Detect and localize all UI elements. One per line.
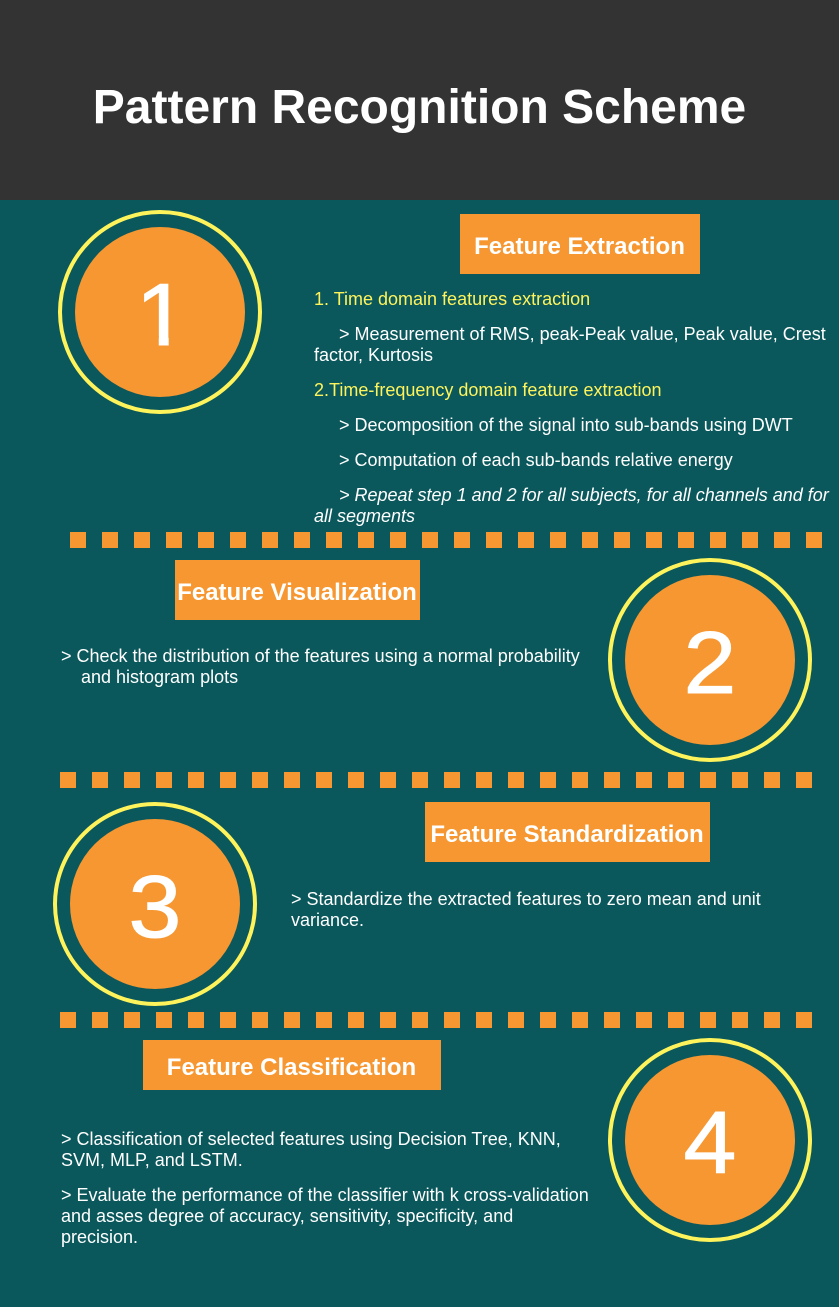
text block: feature extraction steps: factor, Kurtosis [314, 345, 433, 365]
text block: feature classification: > Classification of selected features using Decision Tree, KNN, [61, 1129, 561, 1149]
icon: number 3 badge: 3 [129, 857, 181, 956]
text block: feature visualization: > Check the distribution of the features using a normal probability [61, 646, 580, 666]
icon: number 3 badge [53, 802, 257, 1006]
heading: Feature Classification [142, 1040, 440, 1090]
icon: number 1 badge: 1 [136, 265, 188, 364]
text block: feature extraction steps [314, 289, 830, 526]
icon: number 2 badge [608, 558, 812, 762]
heading: Feature Standardization [424, 802, 710, 862]
heading: Feature Extraction: Feature Extraction [474, 233, 685, 260]
text block: feature classification [61, 1129, 589, 1247]
icon: number 4 badge [608, 1038, 812, 1242]
title: Pattern Recognition Scheme [93, 81, 746, 134]
heading: Feature Standardization: Feature Standardization [430, 821, 704, 848]
text block: feature extraction steps: 1. Time domain features extraction [314, 289, 590, 309]
text block: feature classification: > Evaluate the performance of the classifier with k cross-validation [61, 1185, 589, 1205]
icon: number 1 badge [58, 210, 262, 414]
text block: feature classification: SVM, MLP, and LSTM. [61, 1150, 243, 1170]
heading: Feature Visualization: Feature Visualization [177, 579, 417, 606]
text block: feature extraction steps: > Repeat step 1 and 2 for all subjects, for all channels and for [339, 485, 829, 505]
text block: feature visualization: and histogram plots [81, 667, 238, 687]
header band [0, 0, 839, 200]
text block: feature extraction steps: > Measurement of RMS, peak-Peak value, Peak value, Crest [339, 324, 826, 344]
text block: feature extraction steps: > Computation of each sub-bands relative energy [339, 450, 733, 470]
text block: feature extraction steps: all segments [314, 506, 415, 526]
text block: feature extraction steps: 2.Time-frequency domain feature extraction [314, 380, 662, 400]
text block: feature standardization: > Standardize the extracted features to zero mean and unit [291, 889, 761, 909]
heading: Feature Extraction [460, 214, 700, 274]
icon: number 2 badge: 2 [684, 613, 736, 712]
heading: Feature Visualization [174, 560, 420, 620]
text block: feature standardization [291, 889, 761, 930]
text block: feature classification: and asses degree of accuracy, sensitivity, specificity, and [61, 1206, 513, 1226]
text block: feature visualization [61, 646, 580, 687]
text block: feature extraction steps: > Decomposition of the signal into sub-bands using DWT [339, 415, 793, 435]
text block: feature standardization: variance. [291, 910, 364, 930]
heading: Feature Classification: Feature Classification [167, 1054, 416, 1081]
icon: number 4 badge: 4 [684, 1093, 736, 1192]
text block: feature classification: precision. [61, 1227, 138, 1247]
